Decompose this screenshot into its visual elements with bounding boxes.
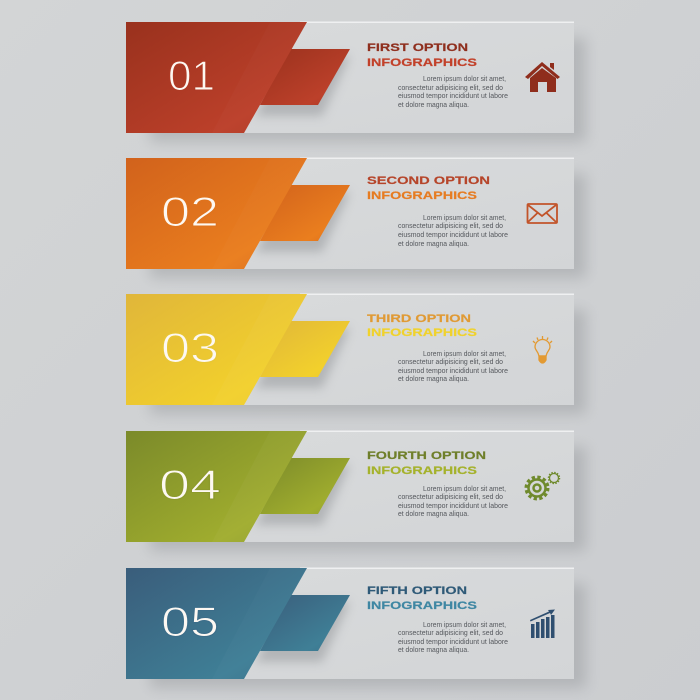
small ribbon <box>260 185 350 241</box>
large ribbon <box>126 431 307 542</box>
small ribbon <box>260 49 350 105</box>
number: 01 <box>168 52 215 99</box>
heading: FOURTH OPTION <box>367 450 486 462</box>
large ribbon <box>126 22 307 133</box>
body text <box>398 486 508 518</box>
large ribbon <box>126 568 307 679</box>
number: 05 <box>161 598 219 645</box>
heading: FIRST OPTION <box>367 42 468 54</box>
body text <box>398 622 508 654</box>
number: 04 <box>159 461 221 508</box>
subheading: INFOGRAPHICS <box>367 465 477 477</box>
body text: et dolore magna aliqua. <box>398 376 469 383</box>
body text: eiusmod tempor incididunt ut labore <box>398 93 508 100</box>
icon: light bulb <box>533 336 552 363</box>
body text <box>398 351 508 383</box>
body text: consectetur adipisicing elit, sed do <box>398 359 503 366</box>
icon: house <box>525 62 560 92</box>
subheading: INFOGRAPHICS <box>367 57 477 69</box>
subheading: INFOGRAPHICS <box>367 600 477 612</box>
heading: THIRD OPTION <box>367 313 471 325</box>
panel: option 2 <box>126 158 586 278</box>
body text: Lorem ipsum dolor sit amet, <box>423 351 506 358</box>
icon: gears <box>526 472 560 499</box>
small ribbon <box>260 321 350 377</box>
large ribbon <box>126 294 307 405</box>
body text: Lorem ipsum dolor sit amet, <box>423 622 506 629</box>
number: 03 <box>161 324 219 371</box>
subheading: INFOGRAPHICS <box>367 190 477 202</box>
body text: eiusmod tempor incididunt ut labore <box>398 639 508 646</box>
body text: consectetur adipisicing elit, sed do <box>398 494 503 501</box>
body text: et dolore magna aliqua. <box>398 647 469 654</box>
body text: Lorem ipsum dolor sit amet, <box>423 486 506 493</box>
body text: et dolore magna aliqua. <box>398 511 469 518</box>
body text <box>398 215 508 248</box>
small ribbon <box>260 458 350 514</box>
heading: FIFTH OPTION <box>367 585 467 597</box>
subheading: INFOGRAPHICS <box>367 327 477 339</box>
heading: SECOND OPTION <box>367 175 490 187</box>
body text: Lorem ipsum dolor sit amet, <box>423 215 506 222</box>
small ribbon <box>260 595 350 651</box>
large ribbon <box>126 158 307 269</box>
body text: et dolore magna aliqua. <box>398 102 469 109</box>
body text: eiusmod tempor incididunt ut labore <box>398 503 508 510</box>
body text: et dolore magna aliqua. <box>398 241 469 248</box>
panel: option 5 <box>126 568 586 688</box>
panel: option 1 <box>126 22 586 142</box>
body text: Lorem ipsum dolor sit amet, <box>423 76 506 83</box>
icon: envelope <box>528 204 557 223</box>
body text: eiusmod tempor incididunt ut labore <box>398 232 508 239</box>
body text: eiusmod tempor incididunt ut labore <box>398 368 508 375</box>
number: 02 <box>161 188 219 235</box>
icon: growth chart <box>530 610 555 638</box>
panel: option 3 <box>126 294 586 414</box>
body text: consectetur adipisicing elit, sed do <box>398 630 503 637</box>
panel: option 4 <box>126 430 586 551</box>
body text: consectetur adipisicing elit, sed do <box>398 223 503 230</box>
body text: consectetur adipisicing elit, sed do <box>398 85 503 92</box>
body text <box>398 76 508 109</box>
